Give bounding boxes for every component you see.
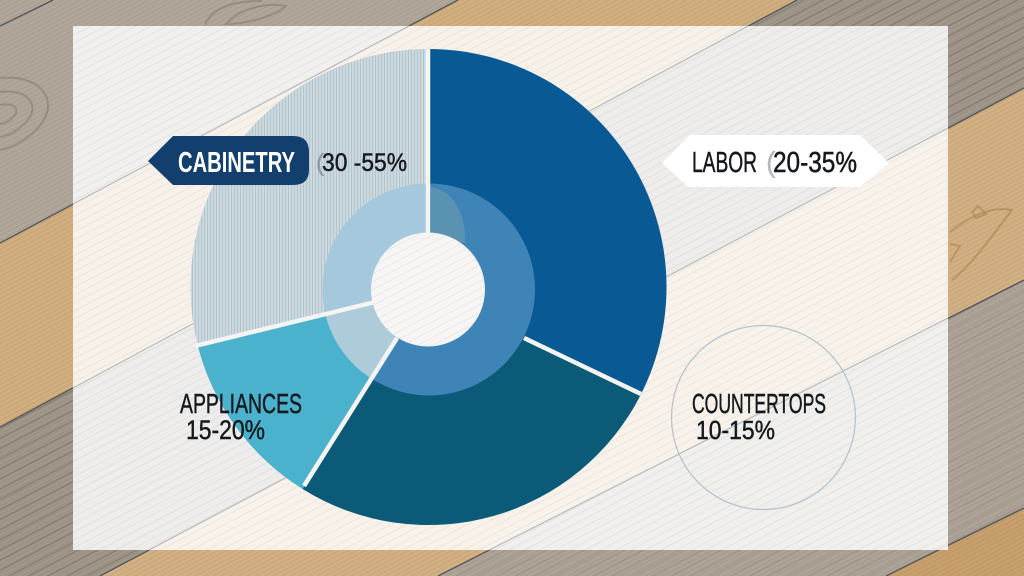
labor percentage: 20-35%: [773, 147, 857, 179]
slice: cabinetry: [190, 49, 428, 345]
label: appliances: [180, 388, 302, 445]
labor percentage: (: [766, 147, 776, 179]
slice: labor: [428, 49, 667, 394]
appliances percentage: 15-20%: [186, 415, 265, 445]
slice separators: [195, 49, 641, 486]
translucent white panel: [73, 26, 948, 550]
cabinetry percentage: 30 -55%: [322, 149, 407, 177]
slice: countertops: [303, 287, 641, 525]
label: labor: [662, 135, 889, 187]
label: countertops: [672, 326, 856, 510]
cabinetry percentage: (: [316, 149, 325, 177]
inner ring: blue segment: [373, 184, 535, 395]
center hole: [371, 232, 485, 346]
cabinetry name: CABINETRY: [178, 147, 295, 179]
appliances name: APPLIANCES: [180, 388, 302, 419]
inner ring: cabinetry segment: [322, 183, 429, 313]
inner ring: appliances segment: [325, 290, 429, 380]
cabinetry tag: [148, 136, 309, 185]
countertops percentage: 10-15%: [696, 415, 775, 445]
countertops name: COUNTERTOPS: [692, 388, 826, 419]
inner ring: darker patch: [431, 187, 465, 243]
donut pie chart: [190, 49, 667, 525]
countertops circle outline: [672, 326, 856, 510]
slice: appliances: [198, 287, 428, 489]
label: cabinetry: [148, 136, 407, 185]
labor tag: [662, 135, 889, 187]
labor name: LABOR: [692, 147, 757, 179]
